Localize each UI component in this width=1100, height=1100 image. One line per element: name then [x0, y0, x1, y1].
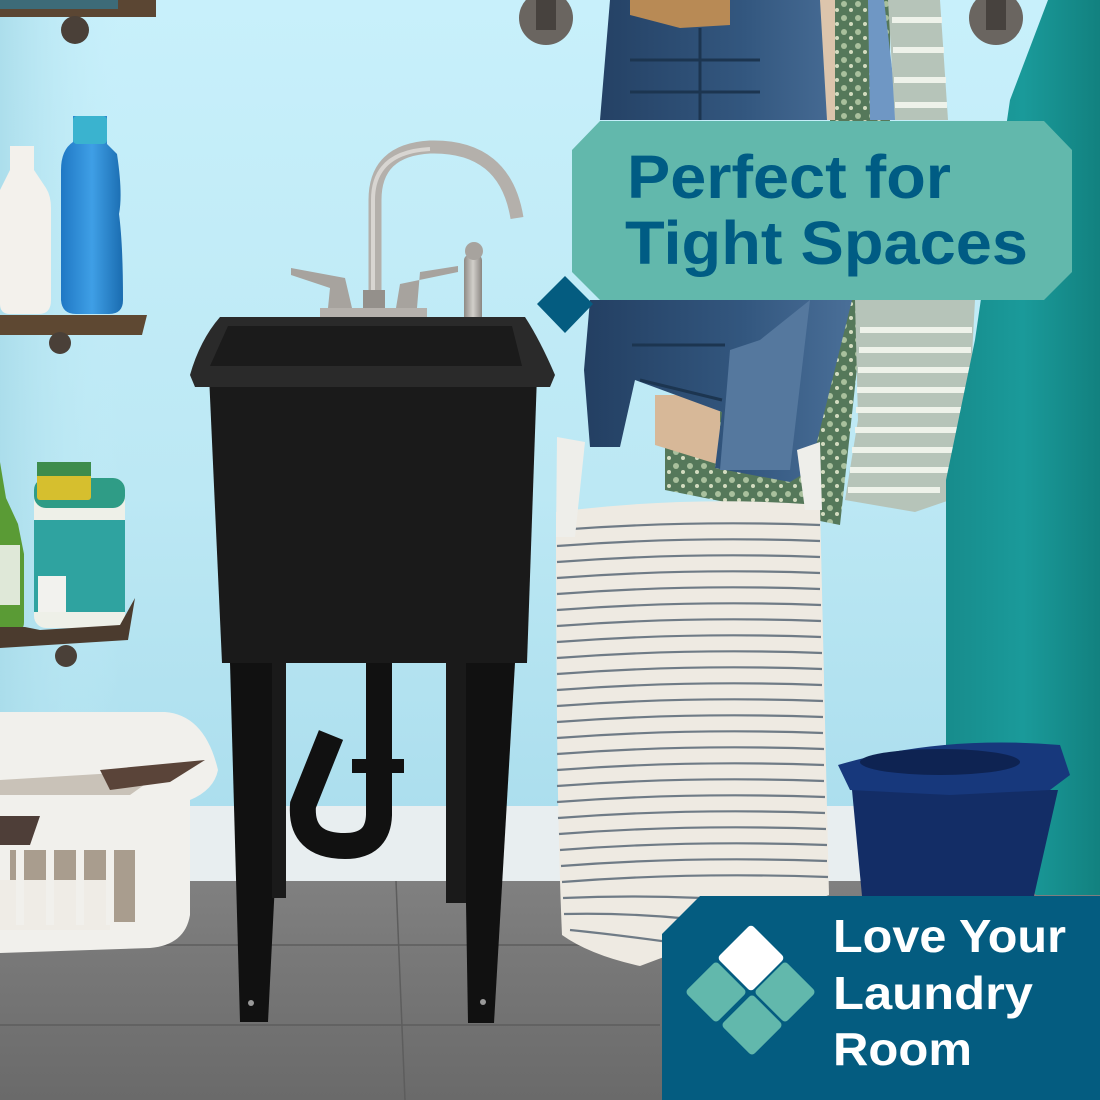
- striped shirt: [845, 0, 975, 512]
- brand name: Love Your: [833, 910, 1066, 962]
- white bottle: [0, 146, 51, 314]
- callout: perfect for tight spaces: [572, 121, 1072, 300]
- rim: [190, 317, 555, 387]
- diamond accent: [537, 276, 593, 333]
- striped hamper: [556, 437, 829, 966]
- tub: [209, 375, 537, 663]
- baseboard: [182, 806, 862, 882]
- brand name: Room: [833, 1023, 972, 1075]
- blue shirt: [868, 0, 898, 120]
- denim jacket: [584, 0, 852, 482]
- laundry basket: [0, 712, 218, 953]
- shelf plank: [0, 315, 147, 335]
- floor: [0, 881, 1100, 1100]
- shelf with bottles: [0, 116, 147, 354]
- lower shelf with cleaners: [0, 462, 135, 667]
- blue bottle: [61, 116, 123, 314]
- brand name: Laundry: [833, 967, 1033, 1019]
- top shelf: [0, 0, 156, 44]
- ironing board: [946, 0, 1100, 895]
- heading line 2: Tight Spaces: [625, 209, 1028, 277]
- pipe flange left: [519, 0, 573, 45]
- pipe flange right: [969, 0, 1023, 45]
- sponge: [37, 462, 91, 500]
- wipes canister: [34, 478, 125, 628]
- green shirt: [665, 0, 890, 525]
- bucket: [838, 742, 1070, 896]
- drain pipe: [303, 663, 404, 846]
- tan shirt: [800, 0, 835, 120]
- shelf plank: [0, 598, 135, 648]
- clothing rack: [584, 0, 975, 525]
- faucet: [291, 147, 517, 328]
- brand logo: [685, 924, 816, 1056]
- legs: [230, 663, 286, 1022]
- brand badge: [662, 896, 1100, 1100]
- brand name: [833, 910, 1066, 1075]
- heading line 1: Perfect for: [627, 143, 951, 211]
- green bottle: [0, 462, 24, 632]
- sink: [190, 147, 555, 1023]
